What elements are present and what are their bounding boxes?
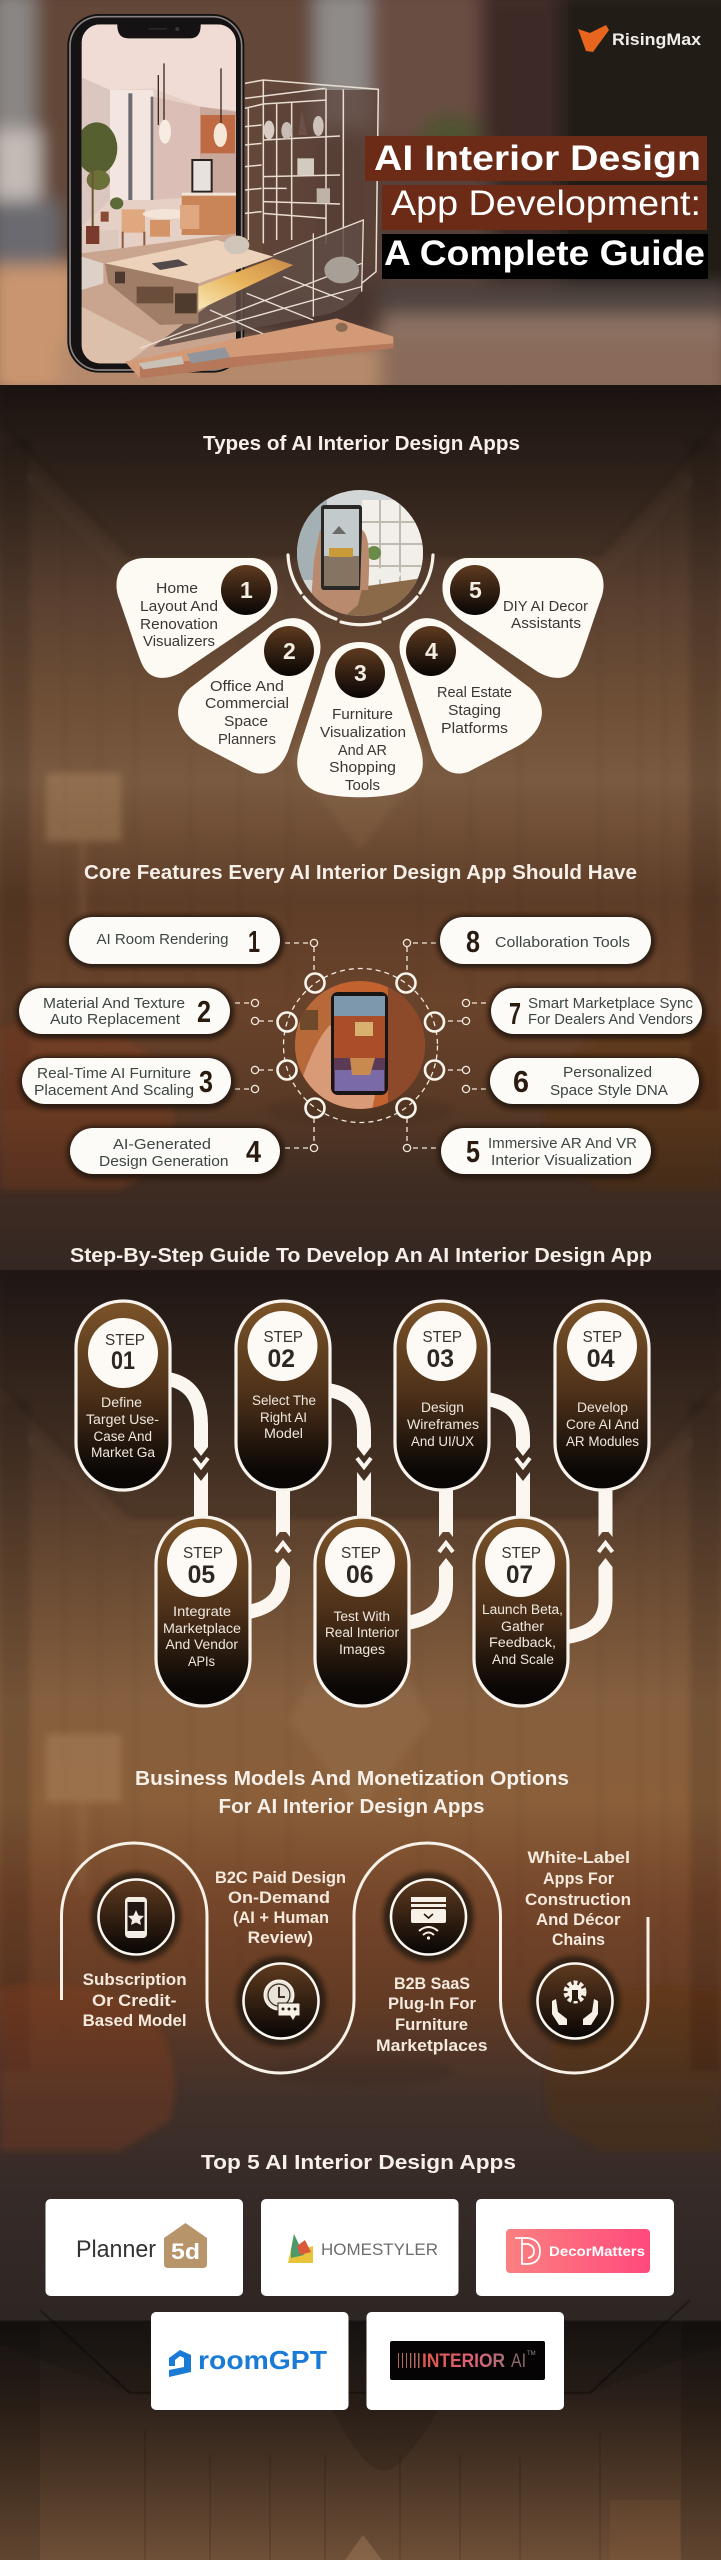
feature 4: AI-Generated [113,1137,211,1153]
step 01: Define [101,1395,142,1410]
step 06: Real Interior [325,1625,399,1640]
card: DecorMatters [476,2199,674,2296]
step 06: 06 [346,1561,374,1589]
step 07: 07 [506,1561,533,1589]
feature 8: Collaboration Tools [495,935,630,951]
step 02: 02 [268,1345,295,1373]
feature 3: 3 [199,1064,213,1099]
step 02: Right AI [260,1410,307,1425]
petal 4: 4 [425,638,438,664]
petal 4 [400,618,542,774]
step 05 [156,1517,250,1706]
model 3 text: Marketplaces [376,2037,488,2055]
phone screen room [76,24,236,363]
icon: phone with star [91,1872,181,1962]
title: AI Interior Design [374,139,701,178]
serpentine line [62,1843,648,2073]
step 06: Images [339,1642,385,1657]
step 04: AR Modules [566,1434,639,1449]
feature 1: AI Room Rendering [96,932,228,948]
panel: core features [16,862,706,1179]
step 07: And Scale [492,1652,554,1667]
title: App Development: [391,184,701,223]
petal 5: Assistants [511,615,581,632]
step 05: APIs [188,1654,215,1669]
step 04: Develop [577,1400,628,1415]
step 07: Gather [501,1619,545,1634]
model 4 text: Construction [525,1891,631,1909]
model 1 text: Subscription [83,1971,187,1989]
feature 4 [67,1126,284,1179]
petal 5 [442,558,604,678]
model 3 text: Plug-In For [388,1995,477,2013]
feature 2: 2 [197,994,211,1029]
step 05: STEP [183,1545,223,1562]
step 07: Feedback, [489,1635,556,1650]
feature 2 [16,986,234,1039]
hologram floor frame [153,220,363,347]
petal 4: Staging [448,702,501,719]
feature 6 [487,1056,703,1109]
model 1 text: Based Model [83,2012,187,2030]
panel: step-by-step guide [70,1245,652,1706]
model 4 text: Chains [552,1931,605,1949]
petal 1: Home [156,580,198,597]
heading: business models: Business Models And Monetization Options [135,1768,569,1790]
feature 7: Smart Marketplace Sync [528,996,693,1012]
model 4 text: And Décor [536,1911,621,1929]
icon: card and wifi [384,1872,474,1962]
petal 1: 1 [240,577,253,603]
panel: business models [62,1768,648,2073]
ring segments [288,555,433,625]
step 07 [474,1517,568,1706]
step 03: 03 [426,1345,454,1373]
step 06: Test With [334,1609,390,1624]
heading: types: Types of AI Interior Design Apps [203,433,520,455]
heading: steps: Step-By-Step Guide To Develop An AI Interior Design App [70,1245,652,1267]
model 3 text: Furniture [395,2016,468,2034]
petal 3: Shopping [329,759,396,776]
card: Planner 5d [46,2199,243,2296]
step 04 [555,1301,649,1490]
feature 3 [19,1056,235,1109]
step 03 [395,1301,489,1490]
feature 1: 1 [248,924,260,959]
petal 2: Planners [218,731,276,748]
step 03: Design [421,1400,464,1415]
petal 3: Visualization [320,724,406,741]
heading: business models: For AI Interior Design Apps [218,1796,484,1818]
petal 1: Layout And [140,598,218,615]
step 05: Integrate [173,1604,231,1619]
petal 3: 3 [354,660,367,686]
step 01: Market Ga [91,1445,155,1460]
feature 6: 6 [513,1064,529,1099]
card: roomGPT: roomGPT [198,2345,327,2375]
petal 5: DIY AI Decor [503,598,588,615]
node circles [278,974,444,1118]
card: Interior AI [366,2312,564,2410]
model 2 text: Review) [248,1929,313,1947]
model 3 text: B2B SaaS [394,1975,470,1993]
model 4 text [525,1849,631,1949]
card: Interior AI: TM [527,2351,536,2357]
phone [67,14,393,378]
step 04: 04 [587,1345,615,1373]
feature 7: 7 [509,996,521,1031]
step 05: And Vendor [166,1637,239,1652]
phone notch [117,23,201,38]
title: A Complete Guide [384,234,705,273]
feature 5 [438,1126,655,1179]
feature 3: Real-Time AI Furniture [37,1066,191,1082]
hologram platform [125,318,393,378]
petal 4: Real Estate [437,684,512,701]
heading: core features: Core Features Every AI Interior Design App Should Have [84,862,637,884]
card: Interior AI: AI [511,2351,526,2372]
step 03: Wireframes [407,1417,479,1432]
petal 2: Space [224,713,268,730]
card: Homestyler [261,2199,458,2296]
step 01: Target Use- [86,1412,159,1427]
step 01: 01 [111,1347,135,1375]
step 07: STEP [502,1545,541,1562]
step 07: Launch Beta, [482,1602,563,1617]
card: Planner 5d: Planner [76,2236,156,2263]
model 1 text [83,1971,187,2030]
feature 1 [66,915,284,968]
petal 1: Renovation [140,616,218,633]
step 05: 05 [188,1561,215,1589]
step 06 [315,1517,409,1706]
feature 5: 5 [466,1134,480,1169]
petal 2: 2 [283,638,296,664]
step 04: Core AI And [566,1417,639,1432]
petal 3: Furniture [332,706,393,723]
step 04: STEP [583,1329,622,1346]
panel: top 5 apps [46,2152,674,2410]
step 02 [236,1301,330,1490]
model 2 text: On-Demand [228,1889,330,1907]
model 1 text: Or Credit- [92,1992,176,2010]
petal 1: Visualizers [143,633,215,650]
step 01: STEP [105,1332,145,1349]
card: roomGPT [151,2312,348,2410]
step 03: And UI/UX [411,1434,474,1449]
card: Planner 5d: 5d [171,2239,200,2264]
model 3 text [376,1975,488,2055]
model 4 text: White-Label [528,1849,630,1867]
icon: clock and chat [236,1956,326,2046]
feature 4: 4 [246,1134,262,1169]
heading: business models [135,1768,569,1818]
feature 3: Placement And Scaling [34,1083,194,1099]
connectors and chevrons [168,1379,612,1637]
feature 6: Space Style DNA [550,1083,668,1099]
feature 2: Material And Texture [43,996,185,1012]
step 02: Model [264,1426,303,1441]
model 2 text: B2C Paid Design [215,1869,346,1887]
petal 4: Platforms [441,720,508,737]
petal 2 [178,618,320,774]
feature 5: Interior Visualization [491,1153,632,1169]
feature 6: Personalized [563,1065,652,1081]
hologram table [105,240,273,283]
dashed connectors [235,943,486,1148]
model 4 text: Apps For [543,1870,615,1888]
feature 7: For Dealers And Vendors [528,1012,693,1028]
hero panel [0,0,721,400]
panel: types of apps [116,433,604,797]
petal 2: Commercial [205,695,289,712]
logo wordmark: RisingMax [612,30,702,49]
petal 5: 5 [469,577,482,603]
petal 3 [297,642,423,797]
card: DecorMatters: DecorMatters [549,2243,645,2259]
hero backdrop photo [0,0,721,400]
feature 8: 8 [466,924,480,959]
brand logo [578,25,702,52]
step 05: Marketplace [163,1621,241,1636]
petal 3: Tools [345,777,380,794]
hologram bookshelf wireframe [245,80,378,283]
petal 1 [116,558,278,678]
model 2 text: (AI + Human [233,1909,329,1927]
step 06: STEP [341,1545,381,1562]
feature 5: Immersive AR And VR [488,1136,637,1152]
card: Homestyler: HOMESTYLER [321,2240,438,2259]
step 03: STEP [422,1329,462,1346]
petal 3: And AR [338,742,387,759]
step 01: Case And [94,1429,152,1444]
feature 2: Auto Replacement [50,1012,180,1028]
heading: top 5: Top 5 AI Interior Design Apps [201,2152,516,2174]
icon: gear in hands [530,1956,620,2046]
feature 7 [488,986,706,1039]
step 02: STEP [264,1329,303,1346]
step 02: Select The [252,1393,316,1408]
petal 2: Office And [210,678,284,695]
logo mark [578,25,609,52]
central phone photo [295,981,425,1109]
feature 8 [437,915,655,968]
card: Interior AI: INTERIOR [422,2351,505,2372]
step 01 [76,1301,170,1490]
title [365,136,708,279]
small nodes [251,939,470,1152]
feature 4: Design Generation [99,1154,228,1170]
central photo [297,490,423,620]
model 2 text [215,1869,346,1947]
